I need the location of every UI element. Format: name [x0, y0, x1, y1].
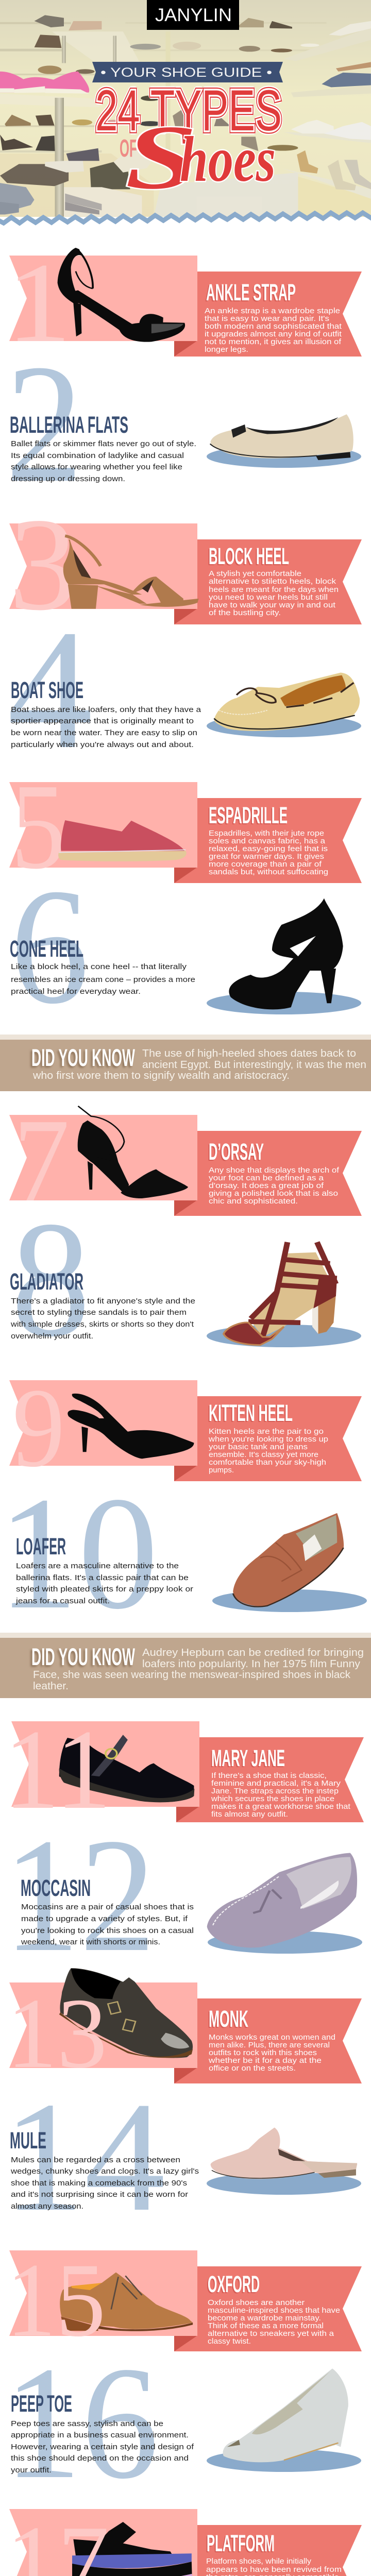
number 14: 14: [3, 2070, 165, 2244]
icon: loafer: [233, 1513, 344, 1607]
description: overwhelm your outfit.: [11, 1332, 93, 1341]
description: Loafers are a masculine alternative to the: [16, 1562, 179, 1570]
description: Monks works great on women and: [209, 2033, 335, 2042]
description: chic and sophisticated.: [209, 1197, 298, 1206]
description: [208, 2033, 335, 2073]
icon: platform sandal: [72, 2522, 192, 2576]
panel: 15 oxford: [6, 2242, 362, 2359]
description: whether be it for a day at the: [208, 2056, 322, 2065]
heading: GLADIATOR: [10, 1268, 83, 1295]
fact text: The use of high-heeled shoes dates back to: [142, 1048, 356, 1059]
description: you need to wear heels but still: [209, 593, 328, 602]
description: sandals but, without suffocating: [209, 868, 328, 876]
panel: 2 ballerina flats: [6, 330, 361, 518]
heading: D’ORSAY: [209, 1139, 264, 1165]
heading: DID YOU KNOW: [31, 1044, 135, 1071]
description: Its equal combination of ladylike and casual: [11, 451, 184, 460]
fact text: loafers into popularity. In her 1975 film Funny: [142, 1658, 360, 1670]
number 12: 12: [4, 1805, 156, 1986]
description: There's a gladiator to fit anyone's style and the: [11, 1297, 195, 1306]
heading: MARY JANE: [211, 1745, 285, 1771]
fact text: Face, she was seen wearing the menswear-inspired shoes in black: [33, 1669, 351, 1681]
number 5: 5: [11, 759, 66, 894]
heading: MONK: [209, 2006, 248, 2032]
description: [15, 1562, 193, 1605]
number 9: 9: [12, 1365, 65, 1490]
description: particularly when you're always out and about.: [11, 740, 194, 749]
ribbon: [11, 1721, 364, 1822]
description: wedges, chunky shoes and clogs. It's a lazy girl's: [10, 2167, 199, 2176]
panel: did you know 2: [0, 1633, 371, 1698]
panel: did you know 1: [0, 1035, 371, 1091]
description: become a wardrobe mainstay.: [208, 2314, 321, 2323]
description: feminine and practical, it's a Mary: [211, 1779, 341, 1788]
description: your outfit.: [11, 2466, 52, 2475]
description: [209, 829, 328, 876]
description: shoe that is making a comeback from the 90's: [11, 2179, 187, 2188]
description: it upgrades almost any kind of outfit: [205, 330, 342, 338]
panel: 12 moccasin: [4, 1805, 362, 1986]
description: [11, 705, 201, 749]
heading: ANKLE STRAP: [206, 279, 296, 306]
title: shoes script: S: [125, 106, 197, 208]
description: longer legs.: [205, 345, 248, 354]
description: However, wearing a certain style and design of: [11, 2443, 194, 2451]
description: weekend, wear it with shorts or minis.: [21, 1938, 160, 1946]
number 8: 8: [11, 1187, 90, 1371]
heading: OXFORD: [208, 2271, 260, 2297]
icon: oxford shoe: [60, 2273, 193, 2331]
description: [21, 1903, 194, 1946]
description: you're looking to rock this shoes on a casual: [21, 1926, 194, 1935]
description: [208, 1427, 328, 1475]
number 13: 13: [7, 1978, 107, 2089]
number 10: 10: [0, 1463, 158, 1642]
description: [11, 962, 195, 996]
description: office or on the streets.: [209, 2064, 296, 2073]
number 16: 16: [4, 2333, 159, 2512]
description: ensemble. It's classy yet more: [209, 1450, 318, 1459]
icon: mule: [211, 2127, 357, 2179]
description: when you're looking to dress up: [208, 1435, 328, 1444]
description: [206, 2557, 342, 2576]
description: Moccasins are a pair of casual shoes that is: [21, 1903, 194, 1911]
description: made to upgrade a variety of styles. But, if: [21, 1914, 188, 1923]
description: [10, 1297, 195, 1341]
panel: 13 monk: [7, 1968, 362, 2089]
icon: espadrille: [58, 820, 187, 861]
number 15: 15: [6, 2242, 106, 2359]
description: Ballet flats or skimmer flats never go out of style.: [11, 439, 196, 448]
panel: 1 ankle strap: [6, 240, 362, 366]
description: alternative to stiletto heels, block: [209, 577, 336, 586]
fact text: ancient Egypt. But interestingly, it was the men: [142, 1059, 366, 1071]
shadow ellipse: [207, 2172, 361, 2195]
description: pumps.: [209, 1466, 234, 1475]
description: practical heel for everyday wear.: [11, 987, 141, 996]
panel: 8 gladiator: [10, 1187, 361, 1371]
panel: 16 peep toe: [4, 2333, 361, 2512]
shadow ellipse: [208, 1931, 362, 1954]
heading: LOAFER: [16, 1533, 66, 1560]
ribbon: [9, 1115, 362, 1216]
description: dressing up or dressing down.: [11, 474, 125, 483]
description: styled with pleated skirts for a preppy look or: [16, 1585, 193, 1594]
description: appears to have been revived from: [206, 2565, 342, 2574]
icon: cone heel shoe: [229, 899, 343, 1009]
heading: BALLERINA FLATS: [10, 412, 128, 438]
heading: BOAT SHOE: [11, 677, 83, 703]
description: not to mention, it gives an illusion of: [205, 337, 342, 346]
description: If there's a shoe that is classic,: [211, 1771, 327, 1780]
fact text: leather.: [33, 1681, 69, 1692]
description: [209, 569, 339, 617]
description: this shoe should depend on the occasion and: [11, 2454, 189, 2463]
icon: block heel sandal: [63, 536, 199, 609]
title: 24 types: 24 TYPES: [95, 78, 282, 143]
description: A stylish yet comfortable: [209, 569, 301, 578]
description: relaxed, easy-going feel that is: [209, 844, 328, 853]
shadow ellipse: [207, 445, 361, 468]
description: Think of these as a more formal: [208, 2321, 324, 2330]
panel: 5 espadrille: [9, 759, 362, 894]
ribbon: [9, 2509, 362, 2576]
description: men alike. Plus, there are several: [209, 2041, 330, 2049]
fact text: Audrey Hepburn can be credited for bringing: [142, 1647, 364, 1658]
shadow ellipse: [212, 1589, 367, 1612]
description: Like a block heel, a cone heel -- that literally: [11, 962, 187, 971]
panel: 4 boat shoe: [7, 595, 361, 785]
description: your foot can be defined as a: [209, 1174, 324, 1182]
heading: ESPADRILLE: [209, 802, 288, 828]
description: your basic tank and jeans: [209, 1443, 308, 1451]
heading: DID YOU KNOW: [31, 1643, 135, 1670]
heading: PEEP TOE: [11, 2391, 72, 2417]
shadow ellipse: [207, 992, 361, 1014]
title: shoes script: hoes: [180, 124, 276, 195]
description: classy twist.: [208, 2337, 251, 2346]
ribbon: [9, 2250, 362, 2351]
description: which secures the shoes in place: [211, 1794, 334, 1803]
description: sportier appearance that is originally meant to: [11, 717, 194, 725]
shadow ellipse: [207, 2449, 361, 2472]
shadow ellipse: [207, 715, 361, 737]
description: makes it a great workhorse shoe that: [211, 1802, 351, 1811]
description: An ankle strap is a wardrobe staple: [205, 307, 340, 315]
ribbon: [9, 1982, 362, 2083]
icon: kitten heel: [68, 1394, 194, 1459]
heading: MOCCASIN: [21, 1875, 91, 1901]
description: soles and canvas fabric, has a: [209, 837, 326, 845]
title: of: OF: [120, 135, 137, 162]
description: Any shoe that displays the arch of: [209, 1166, 340, 1175]
title: 24 types: [95, 78, 282, 143]
heading: PLATFORM: [207, 2530, 275, 2556]
description: giving a polished look that is also: [209, 1189, 338, 1198]
heading: CONE HEEL: [10, 936, 83, 962]
number 1: 1: [6, 240, 72, 366]
icon: monk strap shoe: [59, 1968, 193, 2058]
description: Jane. The straps across the instep: [211, 1787, 339, 1795]
description: Kitten heels are the pair to go: [209, 1427, 324, 1436]
description: [211, 1771, 351, 1819]
description: Platform shoes, while initially: [206, 2557, 312, 2566]
description: have to walk your way in and out: [209, 601, 336, 609]
title: 24 types: 24 TYPES: [95, 78, 282, 143]
description: that is easy to wear and pair. It's: [205, 314, 329, 323]
panel: 9 kitten heel: [9, 1365, 362, 1490]
ribbon: [9, 256, 362, 357]
number 7: 7: [13, 1094, 70, 1227]
panel: 3 block heel: [9, 490, 362, 638]
description: with simple dresses, skirts or shorts so they don't: [10, 1320, 194, 1329]
title: 24 types: 24 TYPES: [95, 78, 282, 143]
description: heels are meant for the days when: [209, 585, 339, 594]
logo: Janylin top: JANYLIN: [155, 5, 232, 25]
description: outfits to rock with this shoes: [209, 2048, 317, 2057]
number 2: 2: [6, 330, 83, 518]
zigzag border: [0, 213, 371, 223]
description: appropriate in a business casual environment.: [11, 2431, 189, 2439]
banner: your shoe guide: • YOUR SHOE GUIDE •: [100, 65, 272, 80]
icon: boat shoe: [214, 672, 360, 731]
description: [11, 439, 196, 483]
description: and it's not surprising since it can be worn for: [11, 2190, 188, 2199]
icon: ankle strap shoe: [58, 248, 185, 342]
description: resembles an ice cream cone – provides a more: [11, 975, 195, 984]
description: style allows for wearing whether you feel like: [11, 463, 182, 471]
description: ballerina flats. It's a classic pair that can be: [16, 1573, 189, 1582]
icon: d'orsay pump: [78, 1106, 188, 1198]
panel: 10 loafer: [0, 1463, 367, 1642]
description: alternative to sneakers yet with a: [208, 2329, 334, 2338]
banner: your shoe guide: [92, 62, 283, 82]
description: [11, 2419, 194, 2475]
title: 24 types: 24 TYPES: [95, 78, 282, 143]
ribbon: [9, 523, 362, 624]
description: fits almost any outfit.: [211, 1810, 288, 1819]
number 11: 11: [4, 1706, 111, 1833]
description: comfortable than your sky-high: [209, 1458, 326, 1467]
description: of the bustling city.: [209, 608, 281, 617]
description: almost any season.: [11, 2202, 83, 2211]
fact text: [33, 1647, 364, 1692]
description: great for warmer days. It gives: [209, 852, 324, 861]
description: masculine-inspired shoes that have: [208, 2306, 340, 2315]
description: jeans for a casual outfit.: [15, 1597, 110, 1605]
number 6: 6: [10, 854, 89, 1038]
description: Boat shoes are like loafers, only that they have a: [11, 705, 201, 714]
icon: gladiator sandal: [224, 1242, 337, 1345]
panel: 6 cone heel: [10, 854, 361, 1038]
heading: MULE: [10, 2127, 46, 2154]
icon: ballerina flat: [210, 414, 353, 460]
panel: 17 platform: [6, 2505, 362, 2576]
panel: 7 d'orsay: [9, 1094, 362, 1227]
description: Espadrilles, with their jute rope: [209, 829, 324, 838]
description: be worn near the water. They are easy to slip on: [11, 728, 197, 737]
fact text: [32, 1048, 366, 1081]
description: d'orsay. It does a great job of: [209, 1181, 324, 1190]
description: more coverage than a pair of: [209, 860, 322, 869]
icon: peep toe wedge: [223, 2368, 348, 2462]
shadow ellipse: [207, 1325, 361, 1347]
description: Peep toes are sassy, stylish and can be: [11, 2419, 163, 2428]
ribbon: [9, 1380, 362, 1481]
fact text: who first wore them to signify wealth and aristocracy.: [32, 1070, 290, 1081]
number 3: 3: [9, 490, 77, 638]
description: Mules can be regarded as a cross between: [11, 2156, 180, 2164]
heading: BLOCK HEEL: [209, 543, 289, 569]
description: [208, 2298, 340, 2346]
description: Oxford shoes are another: [208, 2298, 305, 2307]
description: [205, 307, 342, 354]
icon: moccasin: [207, 1853, 357, 1947]
number 4: 4: [7, 595, 93, 785]
hero: shoe store photo background: [0, 0, 371, 217]
description: [10, 2156, 199, 2211]
logo: Janylin top: [147, 0, 239, 30]
description: both modern and sophisticated that: [205, 322, 342, 331]
panel: 11 mary jane: [4, 1706, 364, 1833]
panel: 14 mule: [3, 2070, 361, 2244]
heading: KITTEN HEEL: [209, 1400, 293, 1426]
icon: mary jane shoe: [59, 1735, 194, 1802]
description: secret to styling these sandals is to pair them: [11, 1308, 187, 1317]
description: [209, 1166, 340, 1206]
ribbon: [9, 782, 362, 883]
